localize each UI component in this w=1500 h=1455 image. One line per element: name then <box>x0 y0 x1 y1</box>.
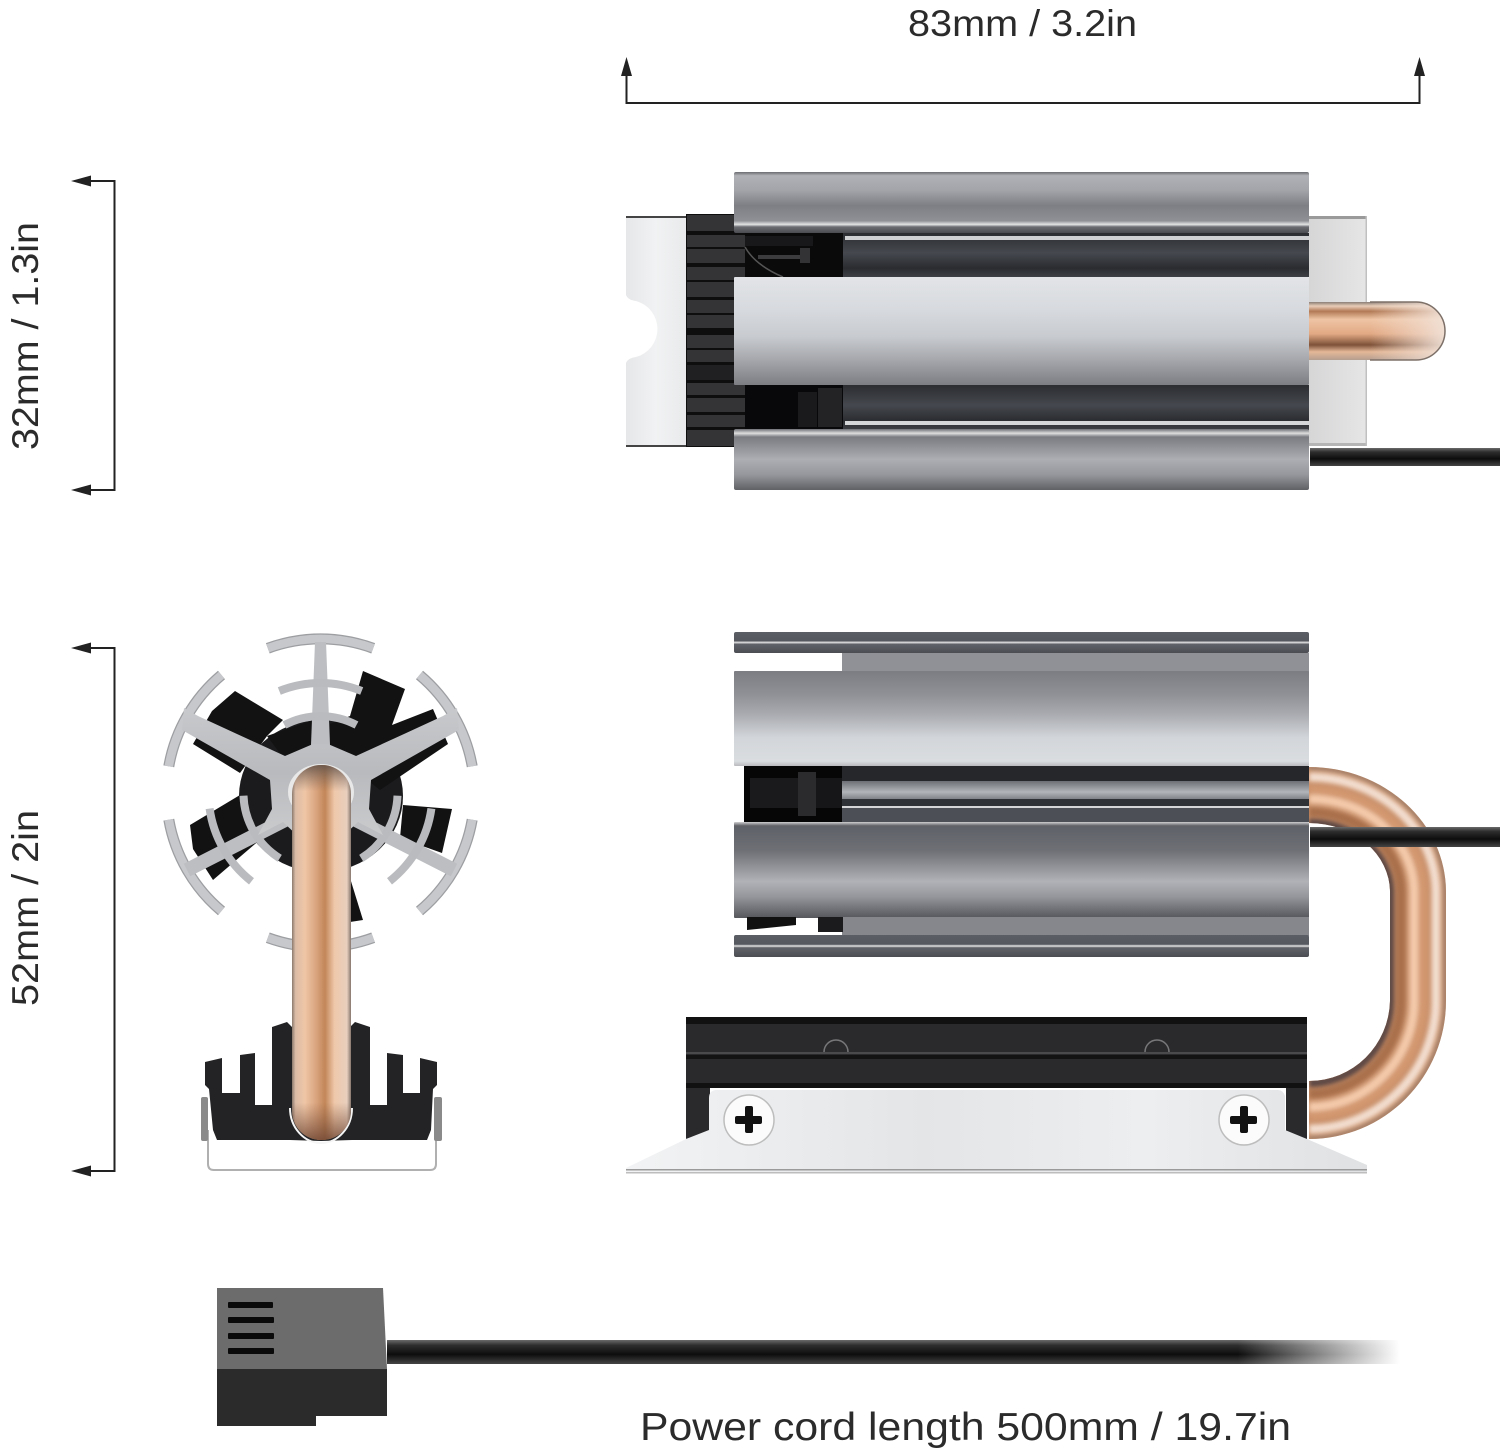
screw right <box>1219 1095 1269 1145</box>
fan hub gap <box>744 766 1309 823</box>
fan blades <box>190 671 452 922</box>
height dimension arrow: 52mm <box>71 642 114 1176</box>
front view of heatsink <box>169 639 472 1170</box>
connector slots <box>228 1302 274 1354</box>
power cord <box>387 1340 1400 1364</box>
height dimension label: 52mm: 52mm / 2in <box>5 810 46 1006</box>
outer ring arcs <box>169 639 472 947</box>
inner arcs <box>210 683 431 881</box>
upper fin <box>734 172 1309 233</box>
black ribbed heatsink <box>686 214 748 447</box>
bottom rail <box>734 935 1309 957</box>
height dimension label: 32mm: 32mm / 1.3in <box>5 222 46 450</box>
lower fin <box>734 429 1309 490</box>
black base block <box>686 1017 1307 1140</box>
power connector <box>217 1288 387 1426</box>
silver spider frame <box>169 639 472 947</box>
spokes <box>311 642 330 745</box>
side view of heatsink <box>626 632 1500 1174</box>
centre fin <box>734 277 1309 385</box>
copper heat pipe u-bend <box>1309 767 1446 1139</box>
connector top face <box>217 1288 387 1369</box>
lower side fin <box>734 822 1309 918</box>
base heatsink fins <box>205 1022 437 1141</box>
connector front face <box>217 1369 387 1426</box>
power cord side view <box>1310 827 1500 847</box>
top rail <box>734 632 1309 653</box>
height dimension arrow: 32mm <box>71 176 114 496</box>
copper pipe end <box>1309 302 1445 360</box>
bracket clips and wire <box>201 1097 442 1170</box>
power cord top view <box>1310 448 1500 466</box>
top view of heatsink <box>626 172 1500 490</box>
outer ring highlights <box>169 639 472 947</box>
dark gap upper <box>745 233 1309 277</box>
upper backing <box>842 653 1309 672</box>
power cord length label: Power cord length 500mm / 19.7in <box>640 1406 1291 1449</box>
lower backing and clips <box>747 917 1309 936</box>
copper heat pipe front <box>288 764 354 1140</box>
screw left <box>724 1095 774 1145</box>
width dimension arrow <box>621 57 1425 103</box>
hub and arms <box>182 708 459 838</box>
upper side fin <box>734 671 1309 766</box>
width dimension label: 83mm / 3.2in <box>908 3 1137 44</box>
dark gap lower <box>745 385 1309 430</box>
left m.2 plate with notch <box>626 217 686 446</box>
silver bracket plate <box>626 1090 1367 1174</box>
right m.2 plate <box>1309 216 1367 446</box>
